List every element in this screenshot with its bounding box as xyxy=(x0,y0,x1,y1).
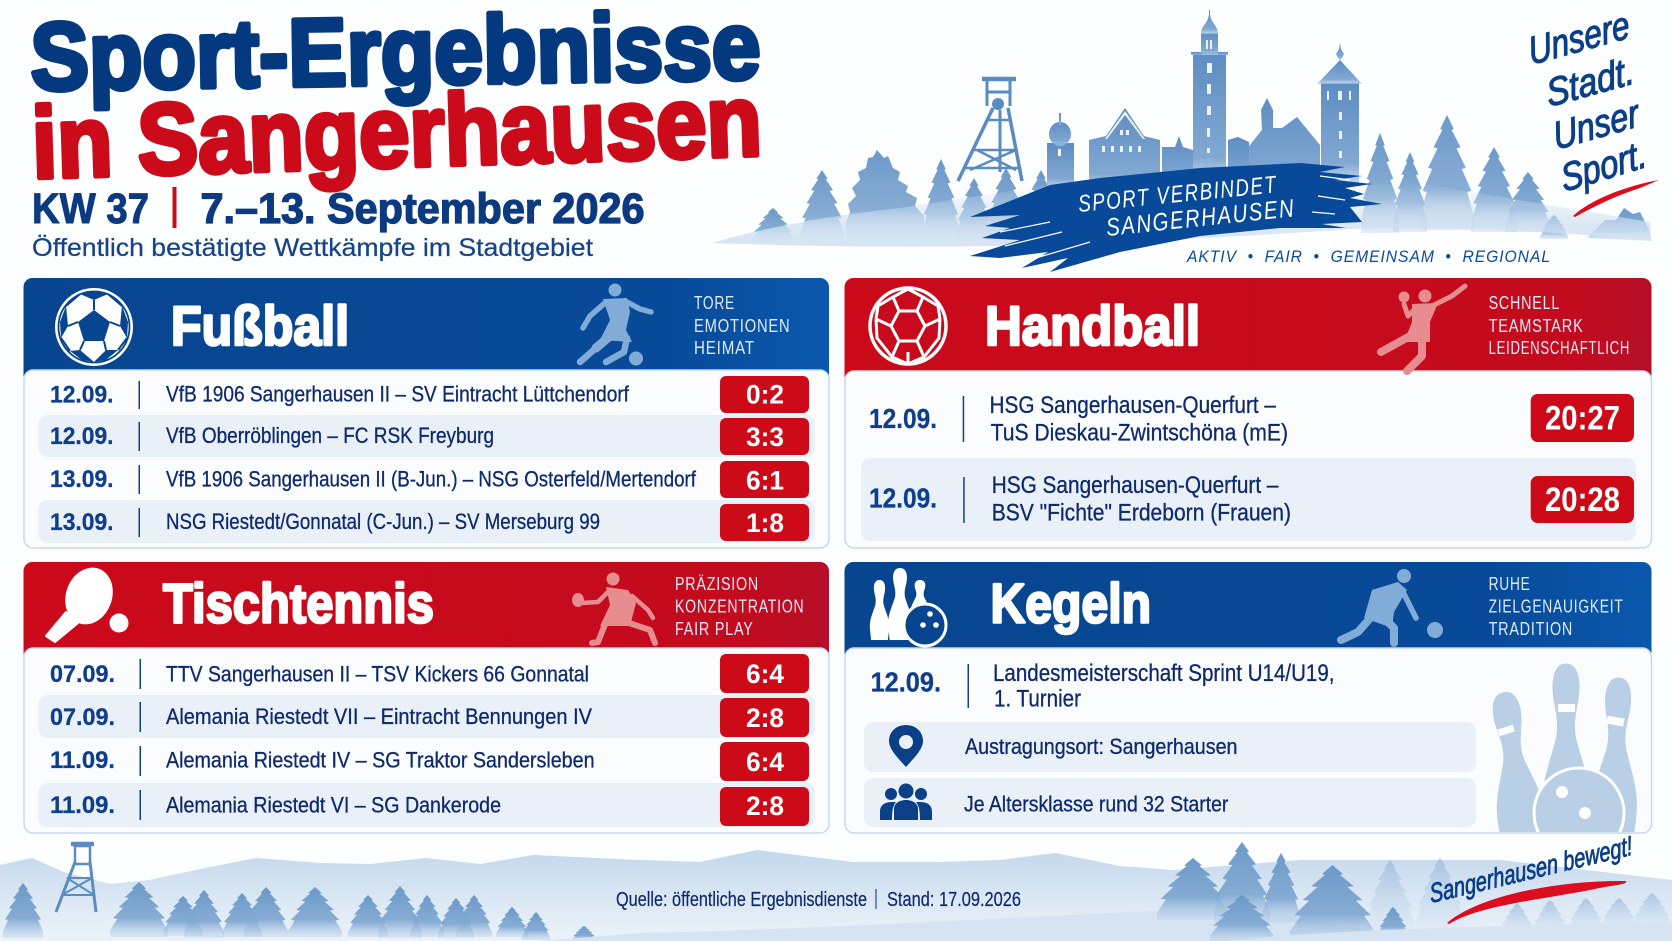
trees right xyxy=(1157,842,1672,941)
result row 4: 1:8 xyxy=(746,508,784,538)
trees left xyxy=(3,882,596,941)
result row 2: Alemania Riestedt VII – Eintracht Bennungen IV xyxy=(166,704,592,729)
result row 2 xyxy=(861,458,1636,541)
icon: football xyxy=(55,288,133,366)
panel: Tischtennis xyxy=(24,561,829,833)
heading: Handball xyxy=(985,294,1200,357)
result row 4: Alemania Riestedt VI – SG Dankerode xyxy=(166,792,501,817)
tall church tower xyxy=(1191,10,1228,183)
result row 2 xyxy=(50,698,809,737)
result row 3: 11.09. xyxy=(50,747,115,774)
tagline: TRADITION xyxy=(1489,619,1573,639)
big pins and ball xyxy=(1492,664,1637,832)
red swoosh xyxy=(1573,180,1659,217)
result row 1 xyxy=(50,376,809,413)
result row 1: 12.09. xyxy=(50,382,114,409)
title line 2: in Sangerhausen xyxy=(30,65,763,200)
icon: pins and ball xyxy=(870,568,946,646)
winding tower xyxy=(958,79,1022,181)
result row 2: 3:3 xyxy=(746,422,784,452)
slogan handwriting xyxy=(1525,4,1659,217)
header band xyxy=(844,562,1652,668)
tagline xyxy=(694,293,790,358)
tagline: SCHNELL xyxy=(1489,293,1560,313)
result row 1: TuS Dieskau-Zwintschöna (mE) xyxy=(991,420,1288,447)
result row 1: TTV Sangerhausen II – TSV Kickers 66 Gonnatal xyxy=(166,662,589,687)
event row: 1. Turnier xyxy=(994,686,1081,713)
alternating row backgrounds xyxy=(38,695,815,827)
icon: people xyxy=(880,784,932,820)
small domed tower xyxy=(1047,113,1074,188)
event row xyxy=(871,660,1334,713)
tagline: RUHE xyxy=(1489,574,1531,594)
title xyxy=(30,0,763,200)
result row 3: 13.09. xyxy=(50,466,114,493)
heading: Tischtennis xyxy=(163,572,434,635)
result row 2: 12.09. xyxy=(50,423,114,450)
alternating row backgrounds xyxy=(38,415,815,543)
hill right xyxy=(1226,923,1672,941)
tagline xyxy=(1489,293,1630,358)
header band xyxy=(844,278,1652,388)
result row 1: 6:4 xyxy=(746,659,784,689)
heading: Fußball xyxy=(171,294,349,357)
starters row: Je Altersklasse rund 32 Starter xyxy=(964,792,1229,817)
result row 2 xyxy=(50,418,809,455)
panel body xyxy=(24,648,829,833)
player silhouette xyxy=(580,284,651,366)
panel: Fußball xyxy=(24,278,829,548)
location row: Austragungsort: Sangerhausen xyxy=(965,734,1238,759)
result row 2: VfB Oberröblingen – FC RSK Freyburg xyxy=(166,423,494,448)
tagline xyxy=(1489,574,1624,639)
result row 1: 12.09. xyxy=(869,403,937,434)
player silhouette xyxy=(572,572,655,643)
result row 3: 6:4 xyxy=(746,747,784,777)
result row 1: VfB 1906 Sangerhausen II – SV Eintracht Lüttchendorf xyxy=(166,382,630,407)
player silhouette xyxy=(1341,569,1443,643)
result row 4: 11.09. xyxy=(50,792,115,819)
tagline: KONZENTRATION xyxy=(675,597,804,617)
slogan handwriting: Stadt. xyxy=(1543,49,1637,116)
banner text line 1: SPORT VERBINDET xyxy=(1077,171,1279,218)
event row: 12.09. xyxy=(871,667,941,698)
result row 3 xyxy=(50,742,809,781)
result row 2: 07.09. xyxy=(50,704,115,731)
result row 2: 12.09. xyxy=(869,483,937,514)
foreground hills xyxy=(540,909,1420,941)
result row 3: 6:1 xyxy=(746,466,784,496)
result row 2: HSG Sangerhausen-Querfurt – xyxy=(992,472,1279,499)
result row 4: 2:8 xyxy=(746,791,784,821)
source line: Stand: 17.09.2026 xyxy=(887,888,1021,911)
panel body xyxy=(24,370,829,548)
date line: KW 37 xyxy=(32,185,149,233)
result row 4 xyxy=(50,504,809,541)
result row 1: 07.09. xyxy=(50,661,115,688)
slogan footer xyxy=(1428,830,1634,924)
player silhouette xyxy=(1381,286,1465,371)
distant mountains xyxy=(0,850,1672,941)
values line: AKTIV • FAIR • GEMEINSAM • REGIONAL xyxy=(1186,248,1551,266)
trees right xyxy=(1361,115,1651,241)
result row 2: 2:8 xyxy=(746,703,784,733)
brush banner xyxy=(970,163,1382,272)
slogan handwriting: Unser xyxy=(1550,92,1644,159)
location row xyxy=(864,722,1476,772)
result row 1: 20:27 xyxy=(1545,400,1620,438)
source line: Quelle: öffentliche Ergebnisdienste xyxy=(616,888,867,911)
trees left xyxy=(752,150,1060,244)
heading: Kegeln xyxy=(990,572,1151,635)
footer landscape xyxy=(0,842,1672,941)
result row 4: NSG Riestedt/Gonnatal (C-Jun.) – SV Merseburg 99 xyxy=(166,509,600,534)
panel body xyxy=(845,371,1652,548)
panel: Kegeln xyxy=(844,562,1652,859)
skyline illustration xyxy=(712,10,1651,247)
header band xyxy=(24,278,829,388)
brush streaks xyxy=(1000,176,1350,258)
gabled building xyxy=(1089,108,1193,190)
subtitle: Öffentlich bestätigte Wettkämpfe im Stadtgebiet xyxy=(32,234,593,262)
church nave xyxy=(1228,98,1320,190)
tagline: PRÄZISION xyxy=(675,574,759,594)
small tower xyxy=(56,844,96,912)
result row 1 xyxy=(869,392,1634,447)
result row 1 xyxy=(50,654,809,693)
tagline: FAIR PLAY xyxy=(675,619,754,639)
result row 3 xyxy=(50,461,809,498)
tagline: EMOTIONEN xyxy=(694,316,790,336)
fog hill xyxy=(712,180,1651,247)
slogan handwriting: Unsere xyxy=(1525,4,1633,74)
result row 2: 20:28 xyxy=(1545,481,1620,519)
date line: 7.–13. September 2026 xyxy=(200,185,644,233)
icon: table tennis paddle xyxy=(46,561,128,642)
result row 1: 0:2 xyxy=(746,380,784,410)
second tower xyxy=(1317,43,1362,183)
event row: Landesmeisterschaft Sprint U14/U19, xyxy=(993,660,1334,687)
panel body xyxy=(845,648,1652,833)
tagline xyxy=(675,574,804,639)
result row 3: Alemania Riestedt IV – SG Traktor Sandersleben xyxy=(166,748,595,773)
result row 1: HSG Sangerhausen-Querfurt – xyxy=(990,392,1276,419)
icon: handball xyxy=(870,288,946,364)
tagline: TEAMSTARK xyxy=(1489,316,1584,336)
slogan handwriting: Sport. xyxy=(1557,133,1650,201)
result row 4: 13.09. xyxy=(50,509,114,536)
result row 2: BSV "Fichte" Erdeborn (Frauen) xyxy=(992,500,1291,527)
starters row xyxy=(864,778,1476,827)
icon: map pin xyxy=(889,725,923,767)
tagline: HEIMAT xyxy=(694,338,755,358)
header band xyxy=(24,562,829,668)
result row 3: VfB 1906 Sangerhausen II (B-Jun.) – NSG Osterfeld/Mertendorf xyxy=(166,467,697,492)
tagline: ZIELGENAUIGKEIT xyxy=(1489,597,1624,617)
red swoosh xyxy=(1447,881,1626,924)
panel: Handball xyxy=(844,278,1652,548)
tagline: TORE xyxy=(694,293,735,313)
banner text line 2: SANGERHAUSEN xyxy=(1105,194,1297,242)
result row 4 xyxy=(50,787,809,826)
